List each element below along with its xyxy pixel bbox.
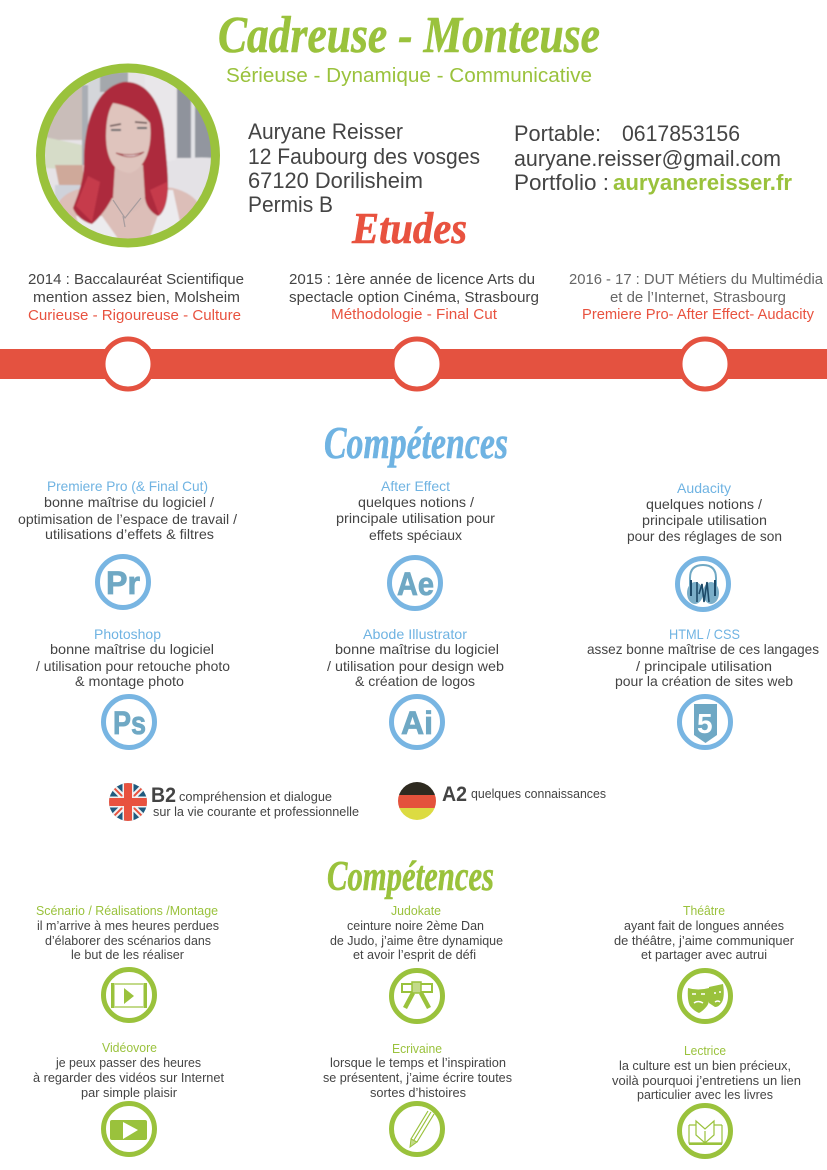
studies: 2014: Curieuse - Rigoureuse - Culture (28, 307, 241, 324)
skill: Illustrator: bonne maîtrise du logiciel (335, 641, 499, 657)
hobby: Vidéovore: à regarder des vidéos sur Internet (33, 1070, 224, 1085)
icon: open book (680, 1106, 730, 1156)
skill: Premiere Pro: bonne maîtrise du logiciel / (44, 494, 214, 510)
icon: Photoshop (104, 696, 154, 748)
icon: pencil (392, 1104, 442, 1154)
hobby: Scénario: Scénario / Réalisations /Montage (36, 903, 218, 918)
icon: Illustrator (392, 696, 442, 748)
language: English: B2 (151, 784, 176, 807)
hobby: Scénario: il m’arrive à mes heures perdues (37, 918, 219, 933)
icon: German flag (398, 782, 436, 821)
icon: theatre masks (680, 970, 730, 1022)
icon: judo belt (392, 970, 442, 1022)
hobby: Scénario: d’élaborer des scénarios dans (45, 933, 211, 948)
hobby: Lectrice (612, 1043, 801, 1102)
studies: 2014 (28, 271, 244, 324)
language: English: compréhension et dialogue (179, 789, 332, 804)
portrait photo (40, 65, 220, 250)
skill: Photoshop (36, 626, 230, 689)
skill: Audacity: Audacity (677, 480, 731, 496)
hobby: Théâtre: de théâtre, j’aime communiquer (614, 933, 795, 948)
studies: 2016-17: 2016 - 17 : DUT Métiers du Multimédia (569, 271, 824, 288)
hobby: Théâtre: Théâtre (683, 903, 725, 918)
language: German: quelques connaissances (471, 786, 606, 801)
skill: Audacity: pour des réglages de son (627, 528, 782, 544)
hobby: Lectrice: la culture est un bien précieux, (619, 1058, 791, 1073)
skill: Audacity: principale utilisation (642, 512, 767, 528)
skill: Illustrator (327, 626, 504, 689)
hobby: Vidéovore: par simple plaisir (81, 1085, 178, 1100)
contact block (514, 121, 792, 195)
skill: HTML / CSS: pour la création de sites web (615, 673, 793, 689)
skill: Premiere Pro: optimisation de l’espace de travail / (18, 511, 237, 527)
skill: Premiere Pro: Premiere Pro (& Final Cut) (47, 478, 208, 494)
icon: Premiere Pro: Pr (106, 565, 140, 601)
contact block: auryanereisser.fr (613, 170, 792, 195)
hobby: Judokate: ceinture noire 2ème Dan (347, 918, 484, 933)
hobby: Théâtre: ayant fait de longues années (624, 918, 784, 933)
address block (248, 119, 480, 217)
hobby: Judokate: de Judo, j’aime être dynamique (330, 933, 503, 948)
icon: video play (104, 1104, 154, 1154)
timeline (0, 339, 827, 389)
icon: Photoshop: Ps (113, 705, 146, 741)
skill: HTML / CSS: HTML / CSS (669, 626, 740, 642)
title: Cadreuse - Monteuse (218, 7, 600, 64)
hobby: Ecrivaine (323, 1041, 512, 1100)
icon: After Effects (390, 558, 440, 608)
language: English: sur la vie courante et professionnelle (153, 804, 359, 819)
hobby: Scénario: le but de les réaliser (71, 947, 185, 962)
skill: After Effect (336, 478, 495, 543)
studies: 2015 (289, 271, 539, 323)
contact block: Portfolio : (514, 170, 609, 195)
hobby: Théâtre (614, 903, 795, 962)
icon: Premiere Pro (98, 556, 148, 608)
studies: 2015: spectacle option Cinéma, Strasbourg (289, 289, 539, 306)
icon: Audacity headphones (678, 558, 728, 610)
skill: After Effect: quelques notions / (358, 494, 474, 510)
heading: Compétences (blue): Compétences (324, 417, 508, 468)
language: German (398, 782, 606, 821)
skill: After Effect: After Effect (381, 478, 450, 494)
icon: Illustrator: Ai (401, 705, 433, 741)
language: English (109, 783, 359, 821)
address block: 12 Faubourg des vosges (248, 144, 480, 169)
skill: Premiere Pro (18, 478, 237, 542)
hobby: Vidéovore: Vidéovore (102, 1040, 157, 1055)
skill: Photoshop: & montage photo (75, 673, 184, 689)
heading: Etudes: Etudes (351, 204, 467, 253)
skill: After Effect: principale utilisation pour (336, 510, 495, 526)
hobby: Vidéovore: je peux passer des heures (55, 1055, 201, 1070)
skill: HTML / CSS: / principale utilisation (636, 658, 772, 674)
skill: Illustrator: / utilisation pour design web (327, 658, 504, 674)
studies: 2015: Méthodologie - Final Cut (331, 306, 498, 323)
studies: 2015: 2015 : 1ère année de licence Arts du (289, 271, 535, 288)
skill: Premiere Pro: utilisations d’effets & filtres (45, 526, 214, 542)
studies: 2016-17 (569, 271, 824, 323)
icon: HTML5 (680, 696, 730, 748)
icon: After Effects: Ae (397, 566, 434, 602)
hobby: Lectrice: Lectrice (684, 1043, 726, 1058)
hobby: Vidéovore (33, 1040, 224, 1100)
skill: Illustrator: Abode Illustrator (363, 626, 467, 642)
address block: Permis B (248, 192, 333, 217)
icon: HTML5: 5 (697, 708, 713, 739)
subtitle: Sérieuse - Dynamique - Communicative (226, 65, 592, 87)
skill: HTML / CSS (587, 626, 819, 689)
address block: Auryane Reisser (248, 119, 403, 144)
contact block: auryane.reisser@gmail.com (514, 146, 781, 171)
hobby: Lectrice: voilà pourquoi j’entretiens un lien (612, 1073, 801, 1088)
hobby: Lectrice: particulier avec les livres (637, 1087, 773, 1102)
contact block: 0617853156 (622, 121, 740, 146)
icon: film (104, 970, 154, 1020)
hobby: Judokate: et avoir l’esprit de défi (353, 947, 476, 962)
hobby: Judokate (330, 903, 503, 962)
hobby: Scénario (36, 903, 219, 962)
contact block: Portable: (514, 121, 601, 146)
hobby: Ecrivaine: Ecrivaine (392, 1041, 442, 1056)
studies: 2016-17: et de l’Internet, Strasbourg (610, 289, 786, 306)
language: German: A2 (442, 783, 467, 806)
skill: Photoshop: bonne maîtrise du logiciel (50, 641, 214, 657)
hobby: Théâtre: et partager avec autrui (641, 947, 767, 962)
skill: After Effect: effets spéciaux (369, 527, 462, 543)
studies: 2014: mention assez bien, Molsheim (33, 289, 240, 306)
skill: Audacity (627, 480, 782, 544)
icon: UK flag (109, 783, 147, 821)
address block: 67120 Dorilisheim (248, 168, 423, 193)
skill: Photoshop: Photoshop (94, 626, 161, 642)
hobby: Judokate: Judokate (391, 903, 441, 918)
hobby: Ecrivaine: lorsque le temps et l’inspiration (330, 1055, 506, 1070)
hobby: Ecrivaine: se présentent, j’aime écrire toutes (323, 1070, 512, 1085)
skill: Photoshop: / utilisation pour retouche photo (36, 658, 230, 674)
skill: Audacity: quelques notions / (646, 496, 762, 512)
studies: 2014: 2014 : Baccalauréat Scientifique (28, 271, 244, 288)
hobby: Ecrivaine: sortes d’histoires (370, 1085, 466, 1100)
studies: 2016-17: Premiere Pro- After Effect- Audacity (582, 306, 814, 323)
heading: Compétences (green): Compétences (327, 854, 494, 900)
skill: HTML / CSS: assez bonne maîtrise de ces langages (587, 641, 819, 657)
skill: Illustrator: & création de logos (355, 673, 475, 689)
